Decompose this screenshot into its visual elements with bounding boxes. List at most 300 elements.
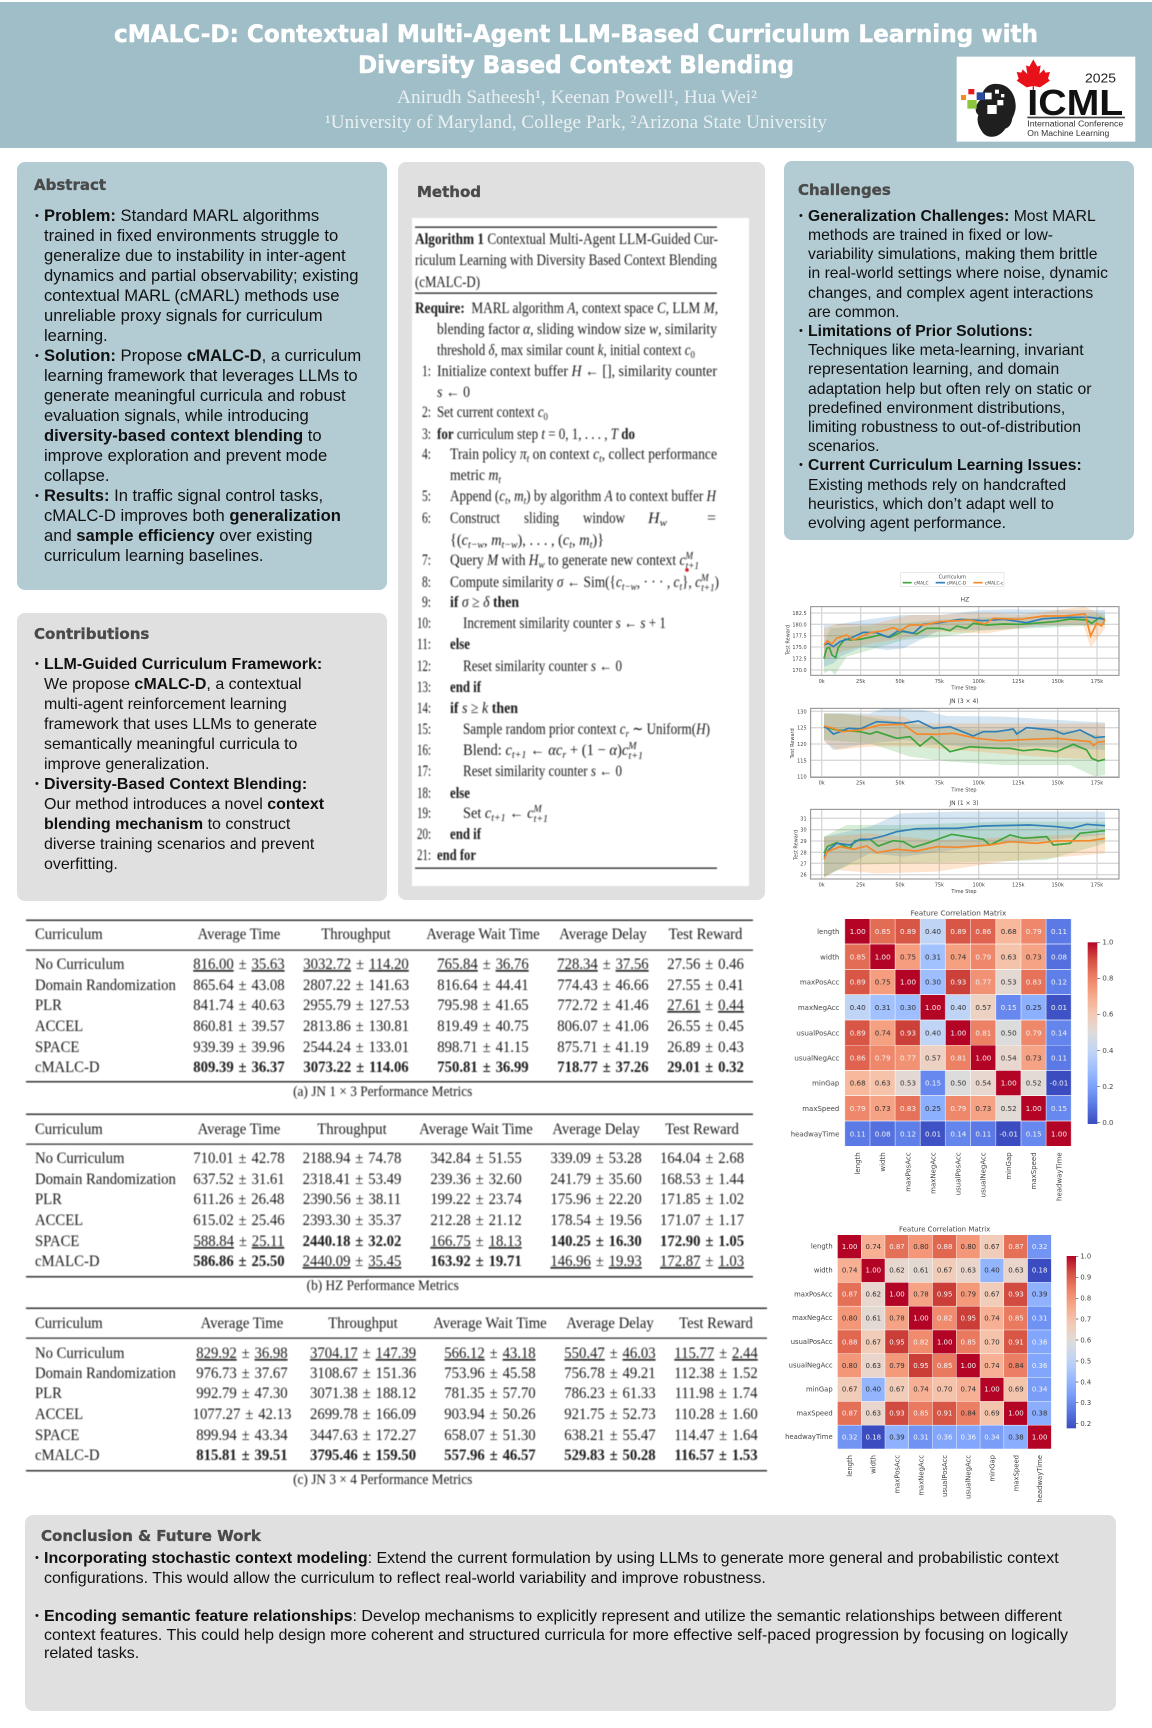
table: JN 3x4 performance metrics: 781.35 ± 57.70	[444, 1384, 536, 1402]
heatmap: feature correlation matrix 1: 0.83	[1026, 978, 1042, 987]
algorithm box: c	[527, 805, 534, 822]
algorithm box: αc	[548, 742, 562, 759]
chart: JN 1x3: 31	[800, 816, 807, 822]
heatmap: feature correlation matrix 2: 0.63	[961, 1267, 976, 1275]
heatmap: feature correlation matrix 1: -0.01	[999, 1129, 1018, 1138]
table: JN 3x4 performance metrics: ACCEL	[35, 1405, 83, 1423]
heatmap: feature correlation matrix 1: 0.73	[1026, 952, 1042, 961]
heatmap: feature correlation matrix 2: 0.18	[1032, 1267, 1047, 1275]
heatmap: feature correlation matrix 2: 0.67	[984, 1291, 1000, 1299]
heatmap: feature correlation matrix 1: 0.57	[975, 1003, 991, 1012]
table: JN 1x3 performance metrics: 860.81 ± 39.57	[193, 1017, 285, 1035]
heatmap: feature correlation matrix 1: 0.81	[950, 1053, 966, 1062]
algorithm box: if σ ≥ δ then	[450, 594, 519, 611]
heatmap: feature correlation matrix 2: 0.74	[984, 1314, 1000, 1322]
title: Diversity Based Context Blending	[358, 51, 794, 79]
table: JN 3x4 performance metrics: 3447.63 ± 172.27	[310, 1426, 416, 1444]
algorithm box: end if	[450, 826, 482, 843]
heatmap: feature correlation matrix 1: 0.25	[925, 1104, 941, 1113]
heatmap: feature correlation matrix 1: 0.54	[1001, 1053, 1017, 1062]
algorithm box: 13:	[417, 679, 431, 696]
heatmap: feature correlation matrix 1: maxNegAcc	[929, 1152, 937, 1194]
table: HZ performance metrics: 172.87 ± 1.03	[660, 1252, 744, 1270]
table: JN 3x4 performance metrics: 786.23 ± 61.33	[564, 1384, 656, 1402]
heatmap: feature correlation matrix 1: 0.15	[925, 1079, 941, 1088]
algorithm box: =	[707, 510, 716, 527]
heatmap: feature correlation matrix 1: 0.11	[850, 1129, 866, 1138]
algorithm box: Construct	[450, 510, 500, 527]
chart: HZ: 175k	[1091, 679, 1103, 685]
header banner	[0, 2, 1152, 148]
heatmap: feature correlation matrix 1: 0.50	[1001, 1028, 1017, 1037]
algorithm box: c	[695, 574, 701, 591]
algorithm box: metric m	[450, 467, 500, 484]
heatmap: feature correlation matrix 1: headwayTime	[791, 1130, 839, 1138]
heatmap: feature correlation matrix 2: 0.62	[889, 1267, 905, 1275]
table: JN 3x4 performance metrics	[26, 1308, 767, 1488]
legend: curriculum: cMALC	[914, 580, 929, 586]
heatmap: feature correlation matrix 2: 0.9	[1080, 1274, 1091, 1282]
text: challenges bullets: limiting robustness to out-of-distribution	[808, 419, 1081, 436]
heatmap: feature correlation matrix 2: 0.63	[866, 1410, 881, 1418]
heatmap: feature correlation matrix 2: minGap	[806, 1385, 833, 1393]
text: challenges bullets: Current Curriculum Learning Issues:	[808, 457, 1082, 474]
heatmap: feature correlation matrix 1: 0.01	[1051, 1003, 1067, 1012]
heatmap: feature correlation matrix 2: 0.74	[842, 1267, 858, 1275]
table: HZ performance metrics: Throughput	[317, 1120, 387, 1138]
algorithm box: + (1 −	[566, 742, 609, 759]
table: HZ performance metrics: 172.90 ± 1.05	[660, 1232, 744, 1250]
heatmap: feature correlation matrix 1: 0.85	[875, 927, 891, 936]
table: JN 3x4 performance metrics: 815.81 ± 39.51	[196, 1446, 288, 1464]
heatmap: feature correlation matrix 1: width	[820, 953, 839, 961]
chart: HZ: 172.5	[792, 656, 807, 662]
heatmap: feature correlation matrix 1: 0.11	[975, 1129, 991, 1138]
table: JN 3x4 performance metrics: 3071.38 ± 188.12	[310, 1384, 416, 1402]
heatmap: feature correlation matrix 2: 0.74	[961, 1386, 977, 1394]
table: JN 1x3 performance metrics: 29.01 ± 0.32	[667, 1058, 744, 1076]
table: JN 1x3 performance metrics: 765.84 ± 36.76	[437, 955, 529, 973]
heatmap: feature correlation matrix 2: 0.8	[1080, 1295, 1091, 1303]
text: abstract bullets: learning framework that leverages LLMs to	[44, 366, 358, 385]
heatmap: feature correlation matrix 1: 0.11	[1051, 1053, 1067, 1062]
text: abstract bullets: curriculum learning baselines.	[44, 546, 264, 565]
heatmap: feature correlation matrix 2: 0.36	[1032, 1362, 1047, 1370]
heatmap: feature correlation matrix 2: 0.95	[961, 1314, 976, 1322]
table: HZ performance metrics: 178.54 ± 19.56	[550, 1211, 642, 1229]
chart: JN 1x3: 0k	[819, 882, 825, 888]
table: HZ performance metrics: 140.25 ± 16.30	[550, 1232, 642, 1250]
text: contributions bullets: blending mechanism to construct	[44, 816, 291, 833]
text: challenges bullets: adaptation help but often rely on static or	[808, 381, 1091, 398]
heatmap: feature correlation matrix 2: 0.85	[913, 1410, 929, 1418]
heatmap: feature correlation matrix 2: headwayTime	[785, 1433, 833, 1441]
algorithm box: Append (c	[450, 488, 510, 505]
algorithm box: t+1	[628, 750, 643, 762]
heatmap: feature correlation matrix 2: headwayTime	[1036, 1455, 1044, 1503]
table: HZ performance metrics: 611.26 ± 26.48	[194, 1190, 285, 1208]
title: cMALC-D: Contextual Multi-Agent LLM-Based Curriculum Learning with	[114, 20, 1038, 48]
table: HZ performance metrics: 171.85 ± 1.02	[660, 1190, 744, 1208]
table: JN 3x4 performance metrics: cMALC-D	[35, 1446, 100, 1464]
heatmap: feature correlation matrix 2: 0.80	[961, 1243, 976, 1251]
algorithm box: 0	[544, 411, 548, 423]
text: abstract bullets: unreliable proxy signals for curriculum	[44, 306, 323, 325]
text: challenges bullets: Techniques like meta-learning, invariant	[808, 342, 1084, 359]
heatmap: feature correlation matrix 2: 0.3	[1080, 1399, 1091, 1407]
table: JN 3x4 performance metrics: 638.21 ± 55.47	[564, 1426, 656, 1444]
table: JN 1x3 performance metrics: 2955.79 ± 127.53	[303, 996, 409, 1014]
heatmap: feature correlation matrix 1: 0.15	[1026, 1129, 1042, 1138]
table: JN 3x4 performance metrics: 557.96 ± 46.57	[444, 1446, 536, 1464]
algorithm box: 10:	[417, 615, 431, 632]
text: conclusion bullets	[35, 1550, 1068, 1662]
algorithm box: H	[648, 510, 660, 527]
algorithm box: else	[450, 636, 470, 653]
algorithm box: Reset similarity counter s ← 0	[463, 763, 622, 780]
table: JN 3x4 performance metrics: 111.98 ± 1.74	[675, 1384, 758, 1402]
legend: curriculum: cMALC-c	[985, 580, 1004, 586]
text: contributions bullets: •	[35, 778, 39, 790]
heatmap: feature correlation matrix 2: 0.91	[937, 1410, 952, 1418]
chart: HZ: 0k	[819, 679, 825, 685]
heatmap: feature correlation matrix 2: 0.34	[1032, 1386, 1048, 1394]
algorithm box: },	[682, 574, 695, 591]
heatmap: feature correlation matrix 1: 1.00	[1051, 1129, 1067, 1138]
heatmap: feature correlation matrix 2: 0.74	[913, 1386, 929, 1394]
heatmap: feature correlation matrix 1: -0.01	[1050, 1079, 1068, 1088]
table: JN 3x4 performance metrics: Domain Randomization	[35, 1364, 176, 1382]
heatmap: feature correlation matrix 1: usualPosAcc	[955, 1152, 963, 1195]
heatmap: feature correlation matrix 2: 0.85	[961, 1338, 976, 1346]
algorithm box: t+1	[512, 749, 526, 761]
chart: JN 3x4: 100k	[972, 781, 985, 787]
table: JN 1x3 performance metrics: 806.07 ± 41.06	[557, 1017, 649, 1035]
text: abstract bullets: diversity-based context blending to	[44, 426, 322, 445]
heatmap: feature correlation matrix 2: 1.00	[842, 1243, 857, 1251]
algorithm box: w	[539, 559, 545, 571]
algorithm box: c	[593, 446, 599, 463]
heatmap: feature correlation matrix 1: 0.11	[1051, 927, 1067, 936]
heatmap: feature correlation matrix 2: 1.00	[937, 1338, 952, 1346]
heatmap: feature correlation matrix 1: 0.89	[950, 927, 967, 936]
algorithm box: Compute similarity σ ← Sim({c	[450, 574, 626, 591]
heatmap: feature correlation matrix 2: 0.67	[866, 1338, 881, 1346]
heatmap: feature correlation matrix 1: usualNegAcc	[980, 1152, 988, 1197]
table: JN 3x4 performance metrics: 976.73 ± 37.67	[196, 1364, 288, 1382]
heatmap: feature correlation matrix 1: 0.83	[900, 1104, 916, 1113]
heading: method: Method	[417, 183, 481, 201]
table: JN 1x3 performance metrics: 26.55 ± 0.45	[667, 1017, 744, 1035]
chart: JN 1x3: 26	[800, 873, 807, 879]
heatmap: feature correlation matrix 2: 0.32	[1032, 1243, 1047, 1251]
chart: JN 3x4: 25k	[856, 781, 865, 787]
table: HZ performance metrics: Domain Randomization	[35, 1170, 176, 1188]
algorithm box: ,	[572, 532, 579, 549]
algorithm box: t	[527, 453, 530, 465]
text: conclusion bullets: •	[35, 1610, 39, 1622]
table: HZ performance metrics: 241.79 ± 35.60	[550, 1170, 642, 1188]
heatmap: feature correlation matrix 2: 0.34	[984, 1433, 1000, 1441]
text: challenges bullets: evolving agent performance.	[808, 515, 1006, 532]
algorithm box: else	[450, 785, 470, 802]
text: challenges bullets: scenarios.	[808, 438, 880, 455]
text: challenges bullets: in real-world settings where noise, dynamic	[808, 265, 1108, 282]
heatmap: feature correlation matrix 1: 0.93	[950, 978, 966, 987]
table: JN 1x3 performance metrics	[26, 920, 753, 1100]
table: JN 1x3 performance metrics: 27.61 ± 0.44	[667, 996, 744, 1014]
heatmap: feature correlation matrix 2: 0.38	[1008, 1433, 1024, 1441]
table: HZ performance metrics: 637.52 ± 31.61	[193, 1170, 285, 1188]
text: challenges bullets: variability simulations, making them brittle	[808, 246, 1098, 263]
text: contributions bullets: framework that uses LLMs to generate	[44, 716, 317, 733]
panel: challenges	[784, 161, 1134, 540]
heatmap: feature correlation matrix 2: maxSpeed	[796, 1409, 833, 1417]
heatmap: feature correlation matrix 1: 0.15	[1051, 1104, 1067, 1113]
heatmap: feature correlation matrix 1: 0.85	[850, 952, 866, 961]
table: JN 1x3 performance metrics: 2544.24 ± 133.01	[303, 1038, 409, 1056]
table: JN 1x3 performance metrics: 2813.86 ± 130.81	[303, 1017, 409, 1035]
text: abstract bullets: and sample efficiency over existing	[44, 526, 312, 545]
table: HZ performance metrics: 2393.30 ± 35.37	[303, 1211, 402, 1229]
panel: contributions	[17, 613, 387, 901]
heatmap: feature correlation matrix 1: 0.79	[1026, 927, 1042, 936]
text: contributions bullets: Diversity-Based Context Blending:	[44, 776, 307, 793]
table: JN 1x3 performance metrics: cMALC-D	[35, 1058, 100, 1076]
text: abstract bullets: generalize due to instability in inter-agent	[44, 246, 346, 265]
text: abstract bullets: Problem: Standard MARL algorithms	[44, 206, 319, 225]
heatmap: feature correlation matrix 2: 0.70	[937, 1386, 952, 1394]
heatmap: feature correlation matrix 1: 0.68	[1001, 927, 1017, 936]
table: JN 3x4 performance metrics: 3704.17 ± 147.39	[310, 1344, 416, 1362]
heatmap: feature correlation matrix 1: 0.77	[975, 978, 991, 987]
heatmap: feature correlation matrix 1: Feature Correlation Matrix	[910, 909, 1007, 918]
heatmap: feature correlation matrix 2: 0.40	[984, 1267, 1000, 1275]
algorithm box: ←	[526, 742, 548, 759]
heatmap: feature correlation matrix 1: 0.86	[850, 1053, 866, 1062]
chart: JN 3x4: 175k	[1091, 781, 1103, 787]
algorithm box: 11:	[417, 636, 431, 653]
heatmap: feature correlation matrix 2: 1.00	[913, 1314, 929, 1322]
table: JN 3x4 performance metrics: Average Time	[201, 1314, 283, 1332]
chart: HZ: 75k	[935, 679, 944, 685]
chart: JN 1x3: 27	[800, 861, 807, 867]
table: HZ performance metrics: cMALC-D	[35, 1252, 100, 1270]
heatmap: feature correlation matrix 2: 0.4	[1080, 1378, 1091, 1386]
text: challenges bullets	[799, 208, 1108, 532]
algorithm box: for curriculum step t = 0, 1, . . . , T do	[437, 426, 635, 443]
algorithm box: 19:	[417, 805, 431, 822]
heatmap: feature correlation matrix 2: 1.00	[984, 1386, 1000, 1394]
table: JN 3x4 performance metrics: 3108.67 ± 151.36	[310, 1364, 416, 1382]
chart: JN 3x4	[790, 698, 1119, 793]
table: JN 1x3 performance metrics: No Curriculum	[35, 955, 124, 973]
table: JN 3x4 performance metrics: 753.96 ± 45.58	[444, 1364, 536, 1382]
text: contributions bullets: diverse training scenarios and prevent	[44, 836, 315, 853]
table: JN 3x4 performance metrics: 115.77 ± 2.44	[674, 1344, 758, 1362]
text: abstract bullets: improve exploration and prevent mode	[44, 446, 327, 465]
text: challenges bullets: predefined environment distributions,	[808, 400, 1065, 417]
table: HZ performance metrics: 164.04 ± 2.68	[660, 1149, 744, 1167]
chart: JN 1x3: 175k	[1091, 882, 1103, 888]
heatmap: feature correlation matrix 2: maxSpeed	[1012, 1455, 1020, 1491]
table: JN 1x3 performance metrics: 2807.22 ± 141.63	[303, 976, 409, 994]
heatmap: feature correlation matrix 1: 0.74	[950, 952, 967, 961]
table: JN 1x3 performance metrics: SPACE	[35, 1038, 79, 1056]
heatmap: feature correlation matrix 2: length	[811, 1243, 833, 1251]
heatmap: feature correlation matrix 1: 0.15	[1001, 1003, 1017, 1012]
algorithm box: t−w	[622, 581, 637, 593]
heatmap: feature correlation matrix 2: 0.78	[889, 1314, 905, 1322]
heatmap: feature correlation matrix 2: 0.67	[984, 1243, 1000, 1251]
heatmap: feature correlation matrix 1: maxSpeed	[802, 1105, 839, 1113]
heatmap: feature correlation matrix 1: 1.00	[950, 1028, 967, 1037]
algorithm box: sliding	[524, 510, 559, 527]
text: challenges bullets: Existing methods rely on handcrafted	[808, 477, 1066, 494]
chart: JN 3x4: JN (3 × 4)	[948, 698, 979, 705]
icon: ICML 2025 logo: ICML	[1027, 82, 1123, 123]
heatmap: feature correlation matrix 2: 0.39	[889, 1433, 905, 1441]
heatmap: feature correlation matrix 2: 0.40	[866, 1386, 881, 1394]
heatmap: feature correlation matrix 1: 1.00	[1026, 1104, 1042, 1113]
algorithm box: , collect performance	[602, 446, 717, 463]
heading: conclusion: Conclusion & Future Work	[41, 1527, 262, 1545]
heatmap: feature correlation matrix 1: 0.74	[875, 1028, 891, 1037]
table: JN 1x3 performance metrics: 718.77 ± 37.26	[557, 1058, 649, 1076]
algorithm box: 17:	[417, 763, 431, 780]
table: HZ performance metrics: 175.96 ± 22.20	[550, 1190, 642, 1208]
algorithm box: Reset similarity counter s ← 0	[463, 658, 622, 675]
algorithm box: 4:	[422, 446, 431, 463]
text: abstract bullets: dynamics and partial observability; existing	[44, 266, 359, 285]
table: JN 3x4 performance metrics: PLR	[35, 1384, 63, 1402]
heatmap: feature correlation matrix 2: 0.93	[1008, 1291, 1024, 1299]
chart: JN 1x3: 30	[800, 828, 807, 834]
algorithm box: Train policy π	[450, 446, 528, 463]
algorithm box: Require: MARL algorithm A, context space C, LLM M,	[415, 300, 718, 317]
chart: JN 1x3: 100k	[972, 882, 985, 888]
algorithm box: end for	[437, 847, 476, 864]
chart: HZ: 182.5	[792, 611, 807, 617]
heatmap: feature correlation matrix 2: 0.61	[866, 1314, 881, 1322]
heatmap: feature correlation matrix 2: maxPosAcc	[794, 1290, 833, 1298]
algorithm box: t−w	[468, 539, 485, 551]
chart: HZ: 170.0	[792, 668, 807, 674]
heatmap: feature correlation matrix 1: length	[854, 1152, 862, 1175]
table: JN 1x3 performance metrics: 27.56 ± 0.46	[667, 955, 744, 973]
text: abstract bullets: trained in fixed environments struggle to	[44, 226, 338, 245]
heatmap: feature correlation matrix 1: length	[817, 928, 839, 936]
table: JN 1x3 performance metrics: 816.64 ± 44.41	[437, 976, 529, 994]
heatmap: feature correlation matrix 1: 0.79	[950, 1104, 967, 1113]
heatmap: feature correlation matrix 2: Feature Correlation Matrix	[899, 1226, 990, 1234]
table: JN 3x4 performance metrics: 1077.27 ± 42.13	[193, 1405, 292, 1423]
heatmap: feature correlation matrix 1: 0.08	[875, 1129, 891, 1138]
algorithm box: (cMALC-D)	[415, 274, 480, 291]
table: JN 1x3 performance metrics: 841.74 ± 40.63	[193, 996, 285, 1014]
heatmap: feature correlation matrix 2: 0.36	[961, 1433, 976, 1441]
heatmap: feature correlation matrix 2: 0.61	[913, 1267, 929, 1275]
chart: JN 1x3: JN (1 × 3)	[948, 800, 979, 807]
heatmap: feature correlation matrix 1: 0.73	[975, 1104, 991, 1113]
heatmap: feature correlation matrix 2: 1.00	[961, 1362, 976, 1370]
chart: JN 1x3: 25k	[856, 882, 865, 888]
algorithm box: ←	[506, 805, 527, 822]
algorithm box: Set c	[463, 805, 492, 822]
heatmap: feature correlation matrix 2: 1.0	[1080, 1253, 1091, 1261]
text: contributions bullets: •	[35, 658, 39, 670]
heatmap: feature correlation matrix 1: 1.00	[975, 1053, 992, 1062]
heatmap: feature correlation matrix 2: 0.95	[889, 1338, 905, 1346]
table: HZ performance metrics: 163.92 ± 19.71	[430, 1252, 522, 1270]
heatmap: feature correlation matrix 2: usualNegAcc	[789, 1362, 833, 1370]
heatmap: feature correlation matrix 2: 0.88	[842, 1338, 857, 1346]
heatmap: feature correlation matrix 1: width	[879, 1152, 887, 1172]
heatmap: feature correlation matrix 2: maxPosAcc	[893, 1455, 901, 1494]
chart: HZ: 175.0	[792, 645, 807, 651]
heatmap: feature correlation matrix 1: 0.73	[875, 1104, 891, 1113]
chart: JN 3x4: 0k	[819, 781, 825, 787]
text: conclusion bullets: Encoding semantic feature relationships: Develop mechanisms to explicitly represent and utilize the semantic relationships between different	[44, 1608, 1062, 1625]
chart: HZ: 177.5	[792, 634, 807, 640]
heatmap: feature correlation matrix 2: 0.85	[1008, 1314, 1024, 1322]
heatmap: feature correlation matrix 2: 0.82	[913, 1338, 929, 1346]
algorithm box: t	[498, 474, 502, 486]
table: HZ performance metrics: 2318.41 ± 53.49	[303, 1170, 402, 1188]
text: abstract bullets	[35, 206, 361, 565]
table: JN 1x3 performance metrics: (a) JN 1 × 3 Performance Metrics	[293, 1085, 472, 1100]
legend: curriculum: cMALC-D	[947, 580, 967, 586]
heatmap: feature correlation matrix 2: 0.79	[889, 1362, 905, 1370]
table: JN 1x3 performance metrics: 939.39 ± 39.96	[193, 1038, 285, 1056]
text: challenges bullets: •	[799, 459, 803, 471]
table: JN 3x4 performance metrics: 921.75 ± 52.73	[564, 1405, 656, 1423]
heatmap: feature correlation matrix 1: 0.73	[1026, 1053, 1042, 1062]
table: JN 1x3 performance metrics: 898.71 ± 41.15	[437, 1038, 529, 1056]
heatmap: feature correlation matrix 2: 0.80	[913, 1243, 929, 1251]
chart: JN 3x4: 125k	[1012, 781, 1025, 787]
heatmap: feature correlation matrix 2: 0.36	[937, 1433, 952, 1441]
heatmap: feature correlation matrix 1	[791, 909, 1114, 1201]
algorithm box: m	[514, 488, 524, 505]
text: abstract bullets: collapse.	[44, 466, 110, 485]
chart: HZ	[785, 596, 1119, 692]
chart: JN 3x4: 115	[797, 758, 807, 764]
heatmap: feature correlation matrix 1: 0.31	[925, 952, 941, 961]
algorithm box: riculum Learning with Diversity Based Context Blending	[415, 252, 717, 269]
legend: curriculum: Curriculum	[939, 575, 966, 581]
table: HZ performance metrics: No Curriculum	[35, 1149, 124, 1167]
chart: JN 3x4: 110	[797, 775, 807, 781]
algorithm box: s ← 0	[437, 384, 470, 401]
heatmap: feature correlation matrix 1: 0.63	[875, 1079, 891, 1088]
text: challenges bullets: Limitations of Prior Solutions:	[808, 323, 1033, 340]
heatmap: feature correlation matrix 1: 0.75	[875, 978, 891, 987]
table: JN 3x4 performance metrics: 899.94 ± 43.34	[196, 1426, 288, 1444]
heatmap: feature correlation matrix 2: 0.95	[913, 1362, 929, 1370]
text: contributions bullets: multi-agent reinforcement learning	[44, 696, 287, 713]
table: JN 3x4 performance metrics: 2699.78 ± 166.09	[310, 1405, 416, 1423]
text: abstract bullets: Results: In traffic signal control tasks,	[44, 486, 323, 505]
text: conclusion bullets: configurations. This would allow the curriculum to reflect real-world variability and improve robustness.	[44, 1570, 766, 1587]
heatmap: feature correlation matrix 2: 0.69	[1008, 1386, 1024, 1394]
table: JN 3x4 performance metrics: SPACE	[35, 1426, 79, 1444]
table: HZ performance metrics: 2440.18 ± 32.02	[303, 1232, 402, 1250]
heatmap: feature correlation matrix 1: 0.0	[1102, 1119, 1113, 1127]
heatmap: feature correlation matrix 2: 0.87	[1008, 1243, 1024, 1251]
table: JN 3x4 performance metrics: 550.47 ± 46.03	[564, 1344, 656, 1362]
heatmap: feature correlation matrix 2: minGap	[988, 1455, 996, 1482]
